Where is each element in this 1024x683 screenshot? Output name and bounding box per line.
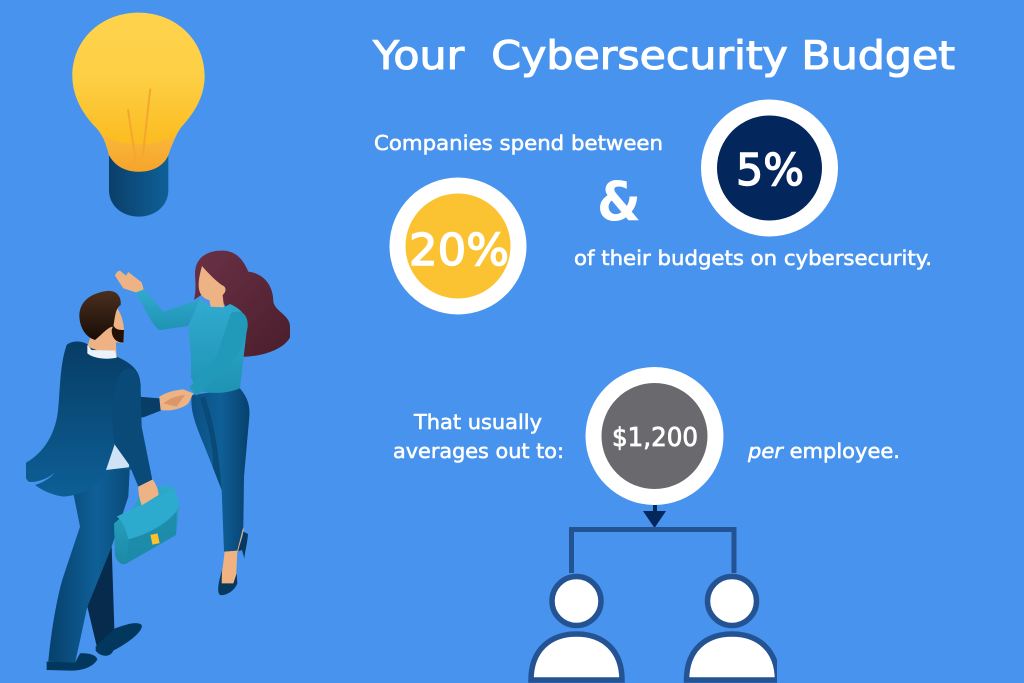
stat circle: $1,200 (586, 367, 724, 505)
stat circle: 20% (390, 178, 526, 314)
briefcase (114, 485, 179, 564)
stat circle: 5%: 5% (736, 145, 804, 196)
icon: employee left (531, 576, 622, 680)
text: of their budgets on cybersecurity: of their budgets on cybersecurity. (574, 246, 932, 270)
arrow: down to connector (643, 505, 666, 528)
icon: employee right (686, 576, 778, 680)
connector bracket (572, 530, 734, 573)
illustration: businessman and businesswoman shaking hands (26, 251, 290, 671)
ampersand: & (597, 170, 641, 233)
text: that usually averages out to (393, 410, 564, 463)
stat circle: 20%: 20% (409, 225, 509, 276)
text: that usually averages out to: averages out to: (393, 439, 564, 463)
title: Your Cybersecurity Budget (372, 34, 955, 79)
stat circle: $1,200: $1,200 (612, 423, 698, 453)
stat circle: 5% (701, 100, 838, 236)
icon: light bulb (72, 13, 205, 217)
woman's front arm (189, 312, 248, 396)
text: that usually averages out to: That usually (413, 410, 542, 434)
woman (115, 251, 290, 595)
text: per employee: per employee. (747, 439, 900, 463)
text: companies spend between: Companies spend between (374, 131, 663, 155)
man (26, 291, 248, 671)
